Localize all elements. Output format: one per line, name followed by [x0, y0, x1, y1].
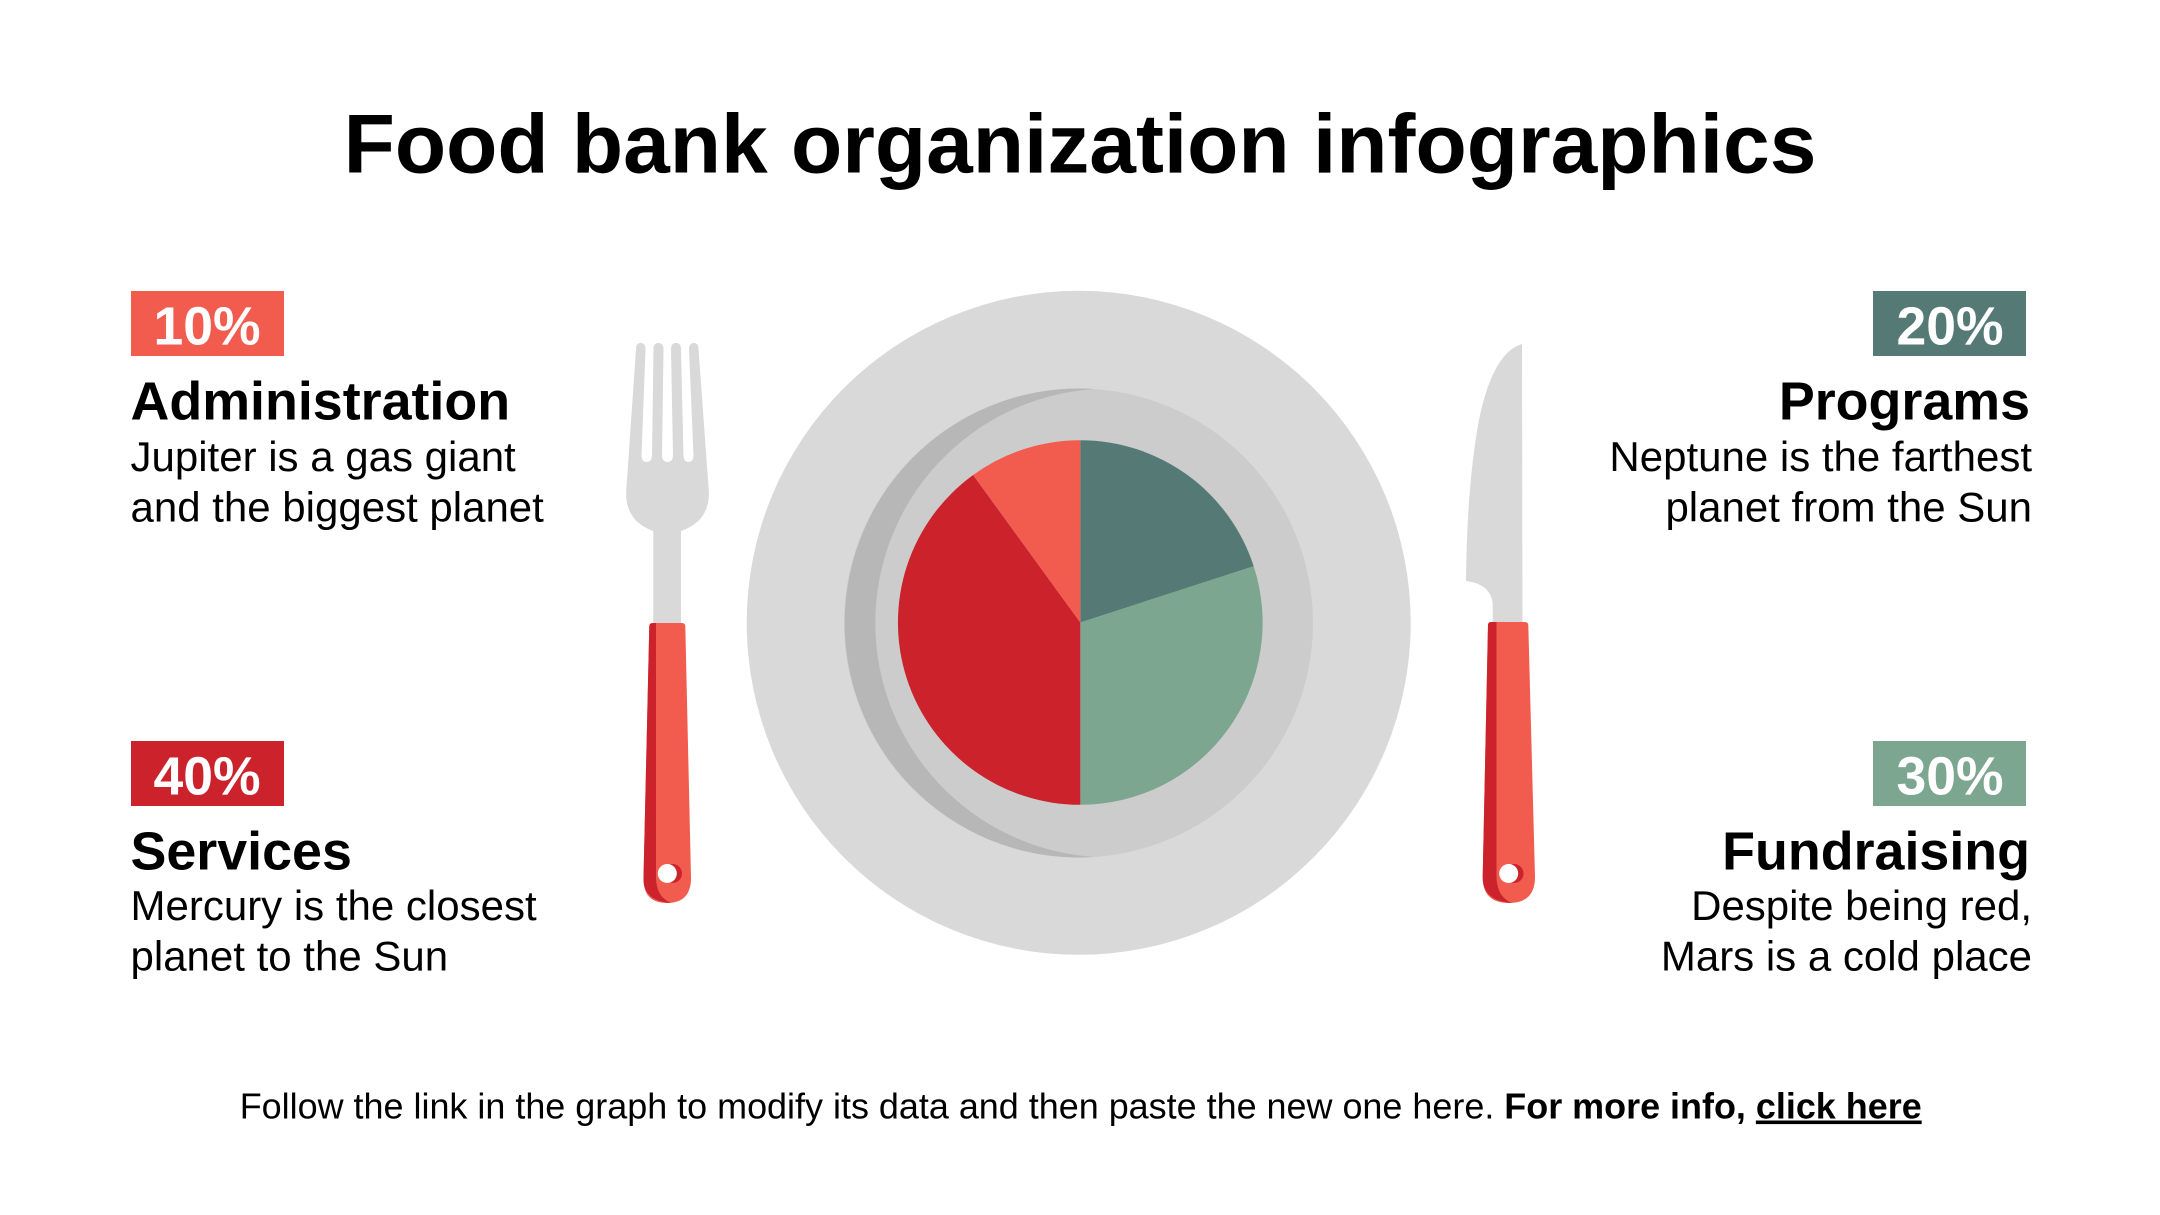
- knife handle: [1483, 622, 1535, 903]
- plate: [747, 291, 1411, 955]
- badge: 30%: [1873, 741, 2026, 806]
- text: fundraising description: Mars is a cold place: [1661, 932, 2032, 980]
- text: programs description: Neptune is the farthest: [1609, 433, 2032, 480]
- icon: fork: [626, 343, 709, 903]
- text: administration description: Jupiter is a gas giant: [130, 433, 516, 480]
- footer note: Follow the link in the graph to modify its data and then paste the new one here. For more info, click here: [240, 1086, 1922, 1126]
- text: programs description: planet from the Sun: [1665, 484, 2032, 530]
- heading: administration: Administration: [130, 372, 510, 432]
- badge: 20%: [1873, 291, 2026, 356]
- badge: 30%: 30%: [1896, 748, 2004, 806]
- panel: administration: [130, 291, 544, 530]
- slice: fundraising 30%: [1080, 566, 1263, 805]
- panel: services: [130, 741, 537, 980]
- pie chart: [898, 440, 1263, 805]
- fork handle: [643, 623, 691, 903]
- panel: fundraising: [1661, 741, 2032, 980]
- heading: services: Services: [130, 822, 352, 882]
- text: administration description: and the biggest planet: [130, 484, 544, 530]
- slice: programs 20%: [1080, 440, 1254, 622]
- slice: services 40%: [898, 475, 1080, 805]
- text: fundraising description: Despite being red,: [1691, 882, 2032, 929]
- title: Food bank organization infographics: [344, 96, 1816, 190]
- heading: programs: Programs: [1779, 372, 2030, 432]
- text: services description: planet to the Sun: [130, 932, 448, 980]
- panel: programs: [1609, 291, 2032, 530]
- badge: 40%: 40%: [153, 748, 261, 806]
- badge: 40%: [131, 741, 284, 806]
- badge: 10%: 10%: [153, 298, 261, 356]
- icon: knife: [1466, 344, 1535, 903]
- heading: fundraising: Fundraising: [1722, 822, 2030, 882]
- slice: administration 10%: [973, 440, 1080, 622]
- badge: 20%: 20%: [1896, 298, 2004, 356]
- badge: 10%: [131, 291, 284, 356]
- text: services description: Mercury is the closest: [130, 882, 537, 929]
